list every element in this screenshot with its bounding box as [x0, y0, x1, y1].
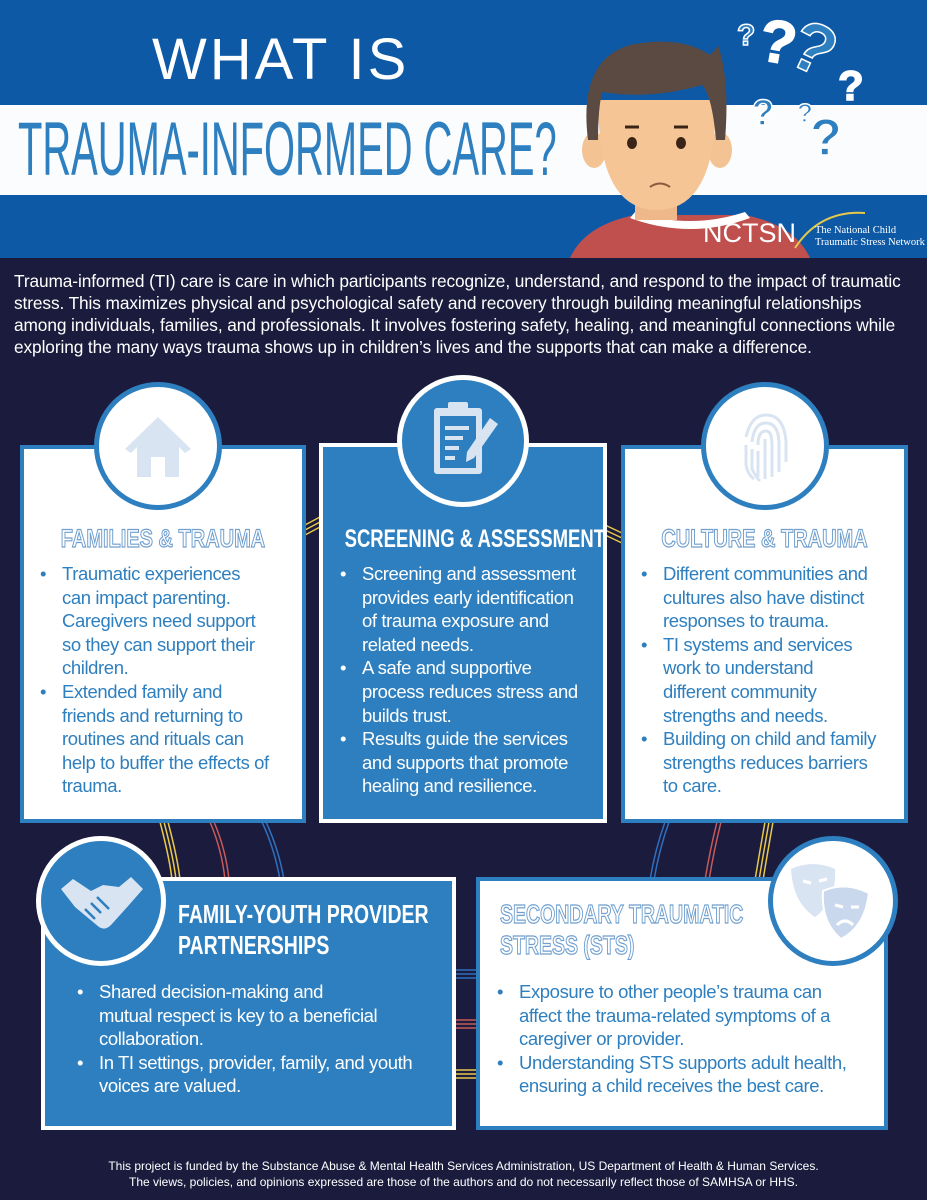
bullets: Shared decision-making and	[99, 981, 323, 1002]
bullets: so they can support their	[62, 634, 255, 655]
bullets: Building on child and family	[663, 728, 876, 749]
bullets	[498, 981, 846, 1096]
bullets: Traumatic experiences	[62, 563, 240, 584]
heading: STRESS (STS)	[500, 930, 634, 960]
icon: house	[94, 382, 222, 510]
bullets: voices are valued.	[99, 1075, 241, 1096]
intro text: exploring the many ways trauma shows up in children’s lives and the supports that can make a difference.	[14, 337, 812, 357]
bullets: can impact parenting.	[62, 587, 230, 608]
bullets: to care.	[663, 775, 722, 796]
bullets: help to buffer the effects of	[62, 752, 269, 773]
footer	[108, 1159, 819, 1189]
bullets: Different communities and	[663, 563, 868, 584]
panel: culture & trauma	[621, 445, 908, 823]
bullets	[340, 563, 578, 796]
bullets: In TI settings, provider, family, and youth	[99, 1052, 412, 1073]
bullets: routines and rituals can	[62, 728, 244, 749]
question marks: ?	[797, 98, 813, 128]
heading: SCREENING & ASSESSMENT	[345, 525, 605, 553]
header band: Traumatic Stress Network	[815, 237, 925, 248]
bullets: related needs.	[362, 634, 474, 655]
icon: fingerprint	[701, 382, 829, 510]
bullets: affect the trauma-related symptoms of a	[519, 1005, 830, 1026]
bullets: healing and resilience.	[362, 775, 537, 796]
bullets: children.	[62, 657, 128, 678]
intro text: among individuals, families, and professionals. It involves fostering safety, healing, and meaningful connections while	[14, 315, 895, 335]
character illustration	[570, 4, 864, 258]
bullets: Extended family and	[62, 681, 222, 702]
icon: theater masks	[768, 836, 898, 966]
bullets: and supports that promote	[362, 752, 568, 773]
title line 1: WHAT IS	[152, 27, 409, 92]
footer: This project is funded by the Substance Abuse & Mental Health Services Administration, US Department of Health & Human Services.	[108, 1159, 819, 1173]
bullets: cultures also have distinct	[663, 587, 864, 608]
bullets: strengths and needs.	[663, 705, 828, 726]
panel: family-youth provider partnerships	[41, 877, 456, 1130]
bullets: builds trust.	[362, 705, 451, 726]
header band: The National Child	[815, 225, 896, 236]
bullets: different community	[663, 681, 816, 702]
intro text: Trauma-informed (TI) care is care in which participants recognize, understand, and respond to the impact of traumatic	[14, 271, 901, 291]
panel: families & trauma	[20, 445, 306, 823]
question marks: ?	[838, 62, 864, 109]
footer: The views, policies, and opinions expressed are those of the authors and do not necessarily reflect those of SAMHSA or HHS.	[129, 1175, 798, 1189]
question marks: ?	[778, 4, 849, 92]
question marks: ?	[754, 6, 802, 78]
bullets: Caregivers need support	[62, 610, 255, 631]
bullets: A safe and supportive	[362, 657, 532, 678]
bullets	[642, 563, 876, 796]
bullets: Exposure to other people’s trauma can	[519, 981, 822, 1002]
icon: handshake	[36, 836, 166, 966]
heading: SECONDARY TRAUMATIC	[500, 899, 743, 929]
bullets: ensuring a child receives the best care.	[519, 1075, 824, 1096]
bullets: Results guide the services	[362, 728, 568, 749]
bullets: work to understand	[663, 657, 813, 678]
bullets: of trauma exposure and	[362, 610, 549, 631]
question marks	[737, 4, 864, 167]
logo: NCTSN	[703, 218, 796, 248]
heading	[500, 899, 744, 960]
bullets: Screening and assessment	[362, 563, 576, 584]
bullets: responses to trauma.	[663, 610, 829, 631]
intro text	[14, 271, 901, 357]
question marks: ?	[752, 92, 774, 133]
heading: FAMILIES & TRAUMA	[61, 525, 265, 553]
heading: CULTURE & TRAUMA	[661, 525, 868, 553]
bullets: collaboration.	[99, 1028, 203, 1049]
connector lines	[160, 516, 774, 1079]
intro text: stress. This maximizes physical and psychological safety and recovery through building meaningful relationships	[14, 293, 861, 313]
panel: screening & assessment	[319, 443, 607, 823]
bullets: strengths reduces barriers	[663, 752, 868, 773]
title line 2: TRAUMA-INFORMED CARE?	[18, 107, 557, 192]
icon: clipboard	[397, 375, 529, 507]
bullets: process reduces stress and	[362, 681, 578, 702]
bullets: Understanding STS supports adult health,	[519, 1052, 846, 1073]
panel: secondary traumatic stress	[476, 877, 888, 1130]
bullets	[40, 563, 270, 796]
question marks: ?	[810, 109, 842, 167]
bullets	[78, 981, 412, 1096]
bullets: trauma.	[62, 775, 122, 796]
bullets: TI systems and services	[663, 634, 852, 655]
question marks: ?	[737, 19, 755, 52]
bullets: friends and returning to	[62, 705, 243, 726]
header band	[0, 0, 927, 258]
heading: PARTNERSHIPS	[178, 930, 329, 960]
heading: FAMILY-YOUTH PROVIDER	[178, 899, 429, 929]
white stripe	[0, 105, 927, 195]
heading	[178, 899, 429, 960]
bullets: caregiver or provider.	[519, 1028, 684, 1049]
bullets: mutual respect is key to a beneficial	[99, 1005, 377, 1026]
bullets: provides early identification	[362, 587, 574, 608]
